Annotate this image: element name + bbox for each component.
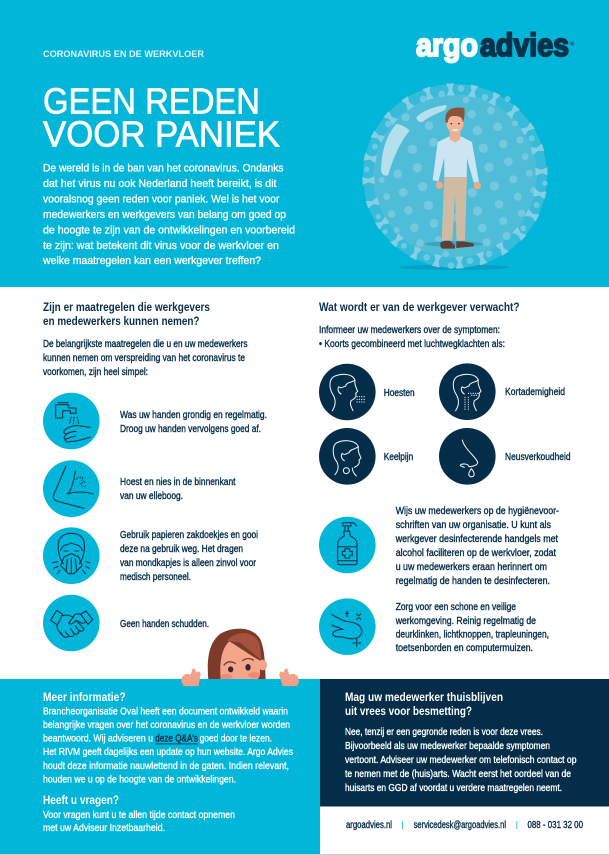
logo: argo advies: argo [416, 27, 478, 63]
more information text: beantwoord. Wij adviseren u [43, 734, 153, 744]
label: Kortademigheid: Kortademigheid [505, 387, 565, 398]
cleaning text: Zorg voor een schone en veilige [396, 602, 516, 613]
panel: measures heading: en medewerkers kunnen nemen? [43, 316, 200, 328]
intro text [42, 162, 295, 267]
symptoms intro: Informeer uw medewerkers over de symptomen: [319, 325, 500, 336]
symptoms intro: • Koorts gecombineerd met luchtwegklachten als: [319, 339, 505, 350]
hygiene text: regelmatig de handen te desinfecteren. [396, 576, 550, 587]
logo: argo advies: advies [480, 27, 569, 63]
hygiene text [395, 506, 559, 587]
label: Neusverkoudheid: Neusverkoudheid [505, 452, 570, 463]
illustration: peeking woman [208, 629, 267, 680]
panel: stay home question [320, 679, 609, 806]
measures intro: kunnen nemen om verspreiding van het coronavirus te [43, 353, 245, 364]
label: Hoesten: Hoesten [384, 388, 415, 399]
intro text: De wereld is in de ban van het coronavirus. Ondanks [43, 162, 284, 174]
footer contact line [346, 820, 583, 831]
label: Keelpijn: Keelpijn [384, 452, 413, 463]
step 1 text [120, 410, 267, 435]
symptoms intro [319, 325, 505, 350]
icon: hand gel bottle [319, 517, 376, 573]
title: GEEN REDEN [43, 80, 260, 122]
icon: runny nose [439, 428, 496, 485]
hygiene text: Wijs uw medewerkers op de hygiënevoor- [396, 506, 559, 517]
contact text: Voor vragen kunt u te allen tijde contact opnemen [43, 810, 235, 821]
icon: coughing [319, 364, 376, 420]
step 1 text: Was uw handen grondig en regelmatig. [120, 410, 267, 421]
heading: stay home [345, 692, 503, 718]
illustration: woman's hands [181, 669, 299, 686]
logo: argo advies [416, 27, 575, 63]
step 3 text: medisch personeel. [120, 572, 191, 583]
cleaning text: toetsenborden en computermuizen. [396, 643, 533, 654]
panel: employer expectations heading: Wat wordt er van de werkgever verwacht? [319, 302, 520, 314]
intro text: de hoogte te zijn van de ontwikkelingen en voorbereid [43, 224, 295, 236]
panel: measures heading: Zijn er maatregelen die werkgevers [43, 302, 210, 314]
icon: sore throat [319, 428, 376, 485]
footer contact line: argoadvies.nl [346, 820, 392, 831]
contact text: met uw Adviseur Inzetbaarheid. [43, 823, 165, 834]
heading: stay home: Mag uw medewerker thuisblijven [345, 692, 503, 704]
stay home text: te nemen met de (huis)arts. Wacht eerst het oordeel van de [345, 769, 571, 780]
icon: face mask [43, 527, 100, 584]
intro text: vooralsnog geen reden voor paniek. Wel is het voor [43, 194, 280, 206]
panel: more information [0, 679, 320, 854]
step 3 text: Gebruik papieren zakdoekjes en gooi [120, 530, 258, 541]
measures intro: voorkomen, zijn heel simpel: [43, 367, 148, 378]
intro text: te zijn: wat betekent dit virus voor de werkvloer en [43, 240, 279, 252]
icon: handshake [43, 595, 100, 651]
measures intro [43, 339, 248, 378]
logo: argo advies: ® [570, 41, 575, 48]
title: VOOR PANIEK [43, 114, 280, 154]
panel: header [0, 0, 609, 287]
step 3 text [120, 530, 258, 583]
kicker: CORONAVIRUS EN DE WERKVLOER [43, 49, 204, 60]
icon: washing hands [43, 393, 100, 449]
title [43, 80, 280, 154]
stay home text [345, 727, 577, 794]
icon: elbow [43, 460, 100, 517]
step 3 text: deze na gebruik weg. Het dragen [120, 544, 243, 555]
hygiene text: werkgever desinfecterende handgels met [395, 534, 558, 545]
more information text: goed door te lezen. [200, 734, 272, 744]
hygiene text: schriften van uw organisatie. U kunt als [396, 520, 551, 531]
icon: cleaning hand [319, 598, 376, 655]
contact text [43, 810, 235, 834]
footer contact line: 088 - 031 32 00 [528, 820, 583, 831]
more information text: houden we u op de hoogte van de ontwikkelingen. [43, 774, 236, 786]
footer contact line: servicedesk@argoadvies.nl [414, 820, 506, 831]
stay home text: Nee, tenzij er een gegronde reden is voor deze vrees. [345, 727, 543, 738]
more information text: Brancheorganisatie Oval heeft een document ontwikkeld waarin [43, 706, 288, 718]
cleaning text: deurklinken, lichtknoppen, trapleuningen, [396, 630, 549, 640]
step 2 text [120, 477, 236, 502]
cleaning text: werkomgeving. Reinig regelmatig de [395, 616, 536, 627]
intro text: welke maatregelen kan een werkgever treffen? [42, 255, 261, 267]
step 1 text: Droog uw handen vervolgens goed af. [120, 424, 261, 435]
step 2 text: van uw elleboog. [120, 491, 183, 502]
stay home text: huisarts en GGD af voordat u verdere maatregelen neemt. [345, 783, 562, 794]
hygiene text: u uw medewerkers eraan herinnert om [396, 562, 547, 573]
more information text: deze Q&A's [155, 734, 198, 744]
intro text: medewerkers en werkgevers van belang om goed op [43, 209, 286, 221]
step 2 text: Hoest en nies in de binnenkant [120, 477, 236, 488]
heading: Meer informatie: Meer informatie? [43, 692, 126, 704]
hygiene text: alcohol faciliteren op de werkvloer, zodat [396, 548, 556, 559]
heading: Heeft u vragen: Heeft u vragen? [43, 795, 119, 807]
icon: shortness of breath [439, 363, 496, 420]
step 4 text: Geen handen schudden. [120, 619, 209, 630]
more information text: Het RIVM geeft dagelijks een update op hun website. Argo Advies [43, 747, 293, 758]
step 3 text: van mondkapjes is alleen zinvol voor [120, 558, 257, 569]
panel: measures heading [43, 302, 210, 328]
more information text [43, 706, 293, 786]
intro text: dat het virus nu ook Nederland heeft bereikt, is dit [43, 178, 276, 190]
cleaning text [395, 602, 549, 654]
stay home text: vertoont. Adviseer uw medewerker om telefonisch contact op [345, 755, 577, 766]
illustration: man in bubble [362, 83, 548, 270]
stay home text: Bijvoorbeeld als uw medewerker bepaalde symptomen [345, 741, 550, 752]
more information text: belangrijke vragen over het coronavirus en de werkvloer worden [43, 720, 290, 731]
heading: stay home: uit vrees voor besmetting? [345, 706, 472, 718]
measures intro: De belangrijkste maatregelen die u en uw medewerkers [43, 339, 248, 350]
more information text: houdt deze informatie nauwlettend in de gaten. Indien relevant, [43, 761, 289, 772]
